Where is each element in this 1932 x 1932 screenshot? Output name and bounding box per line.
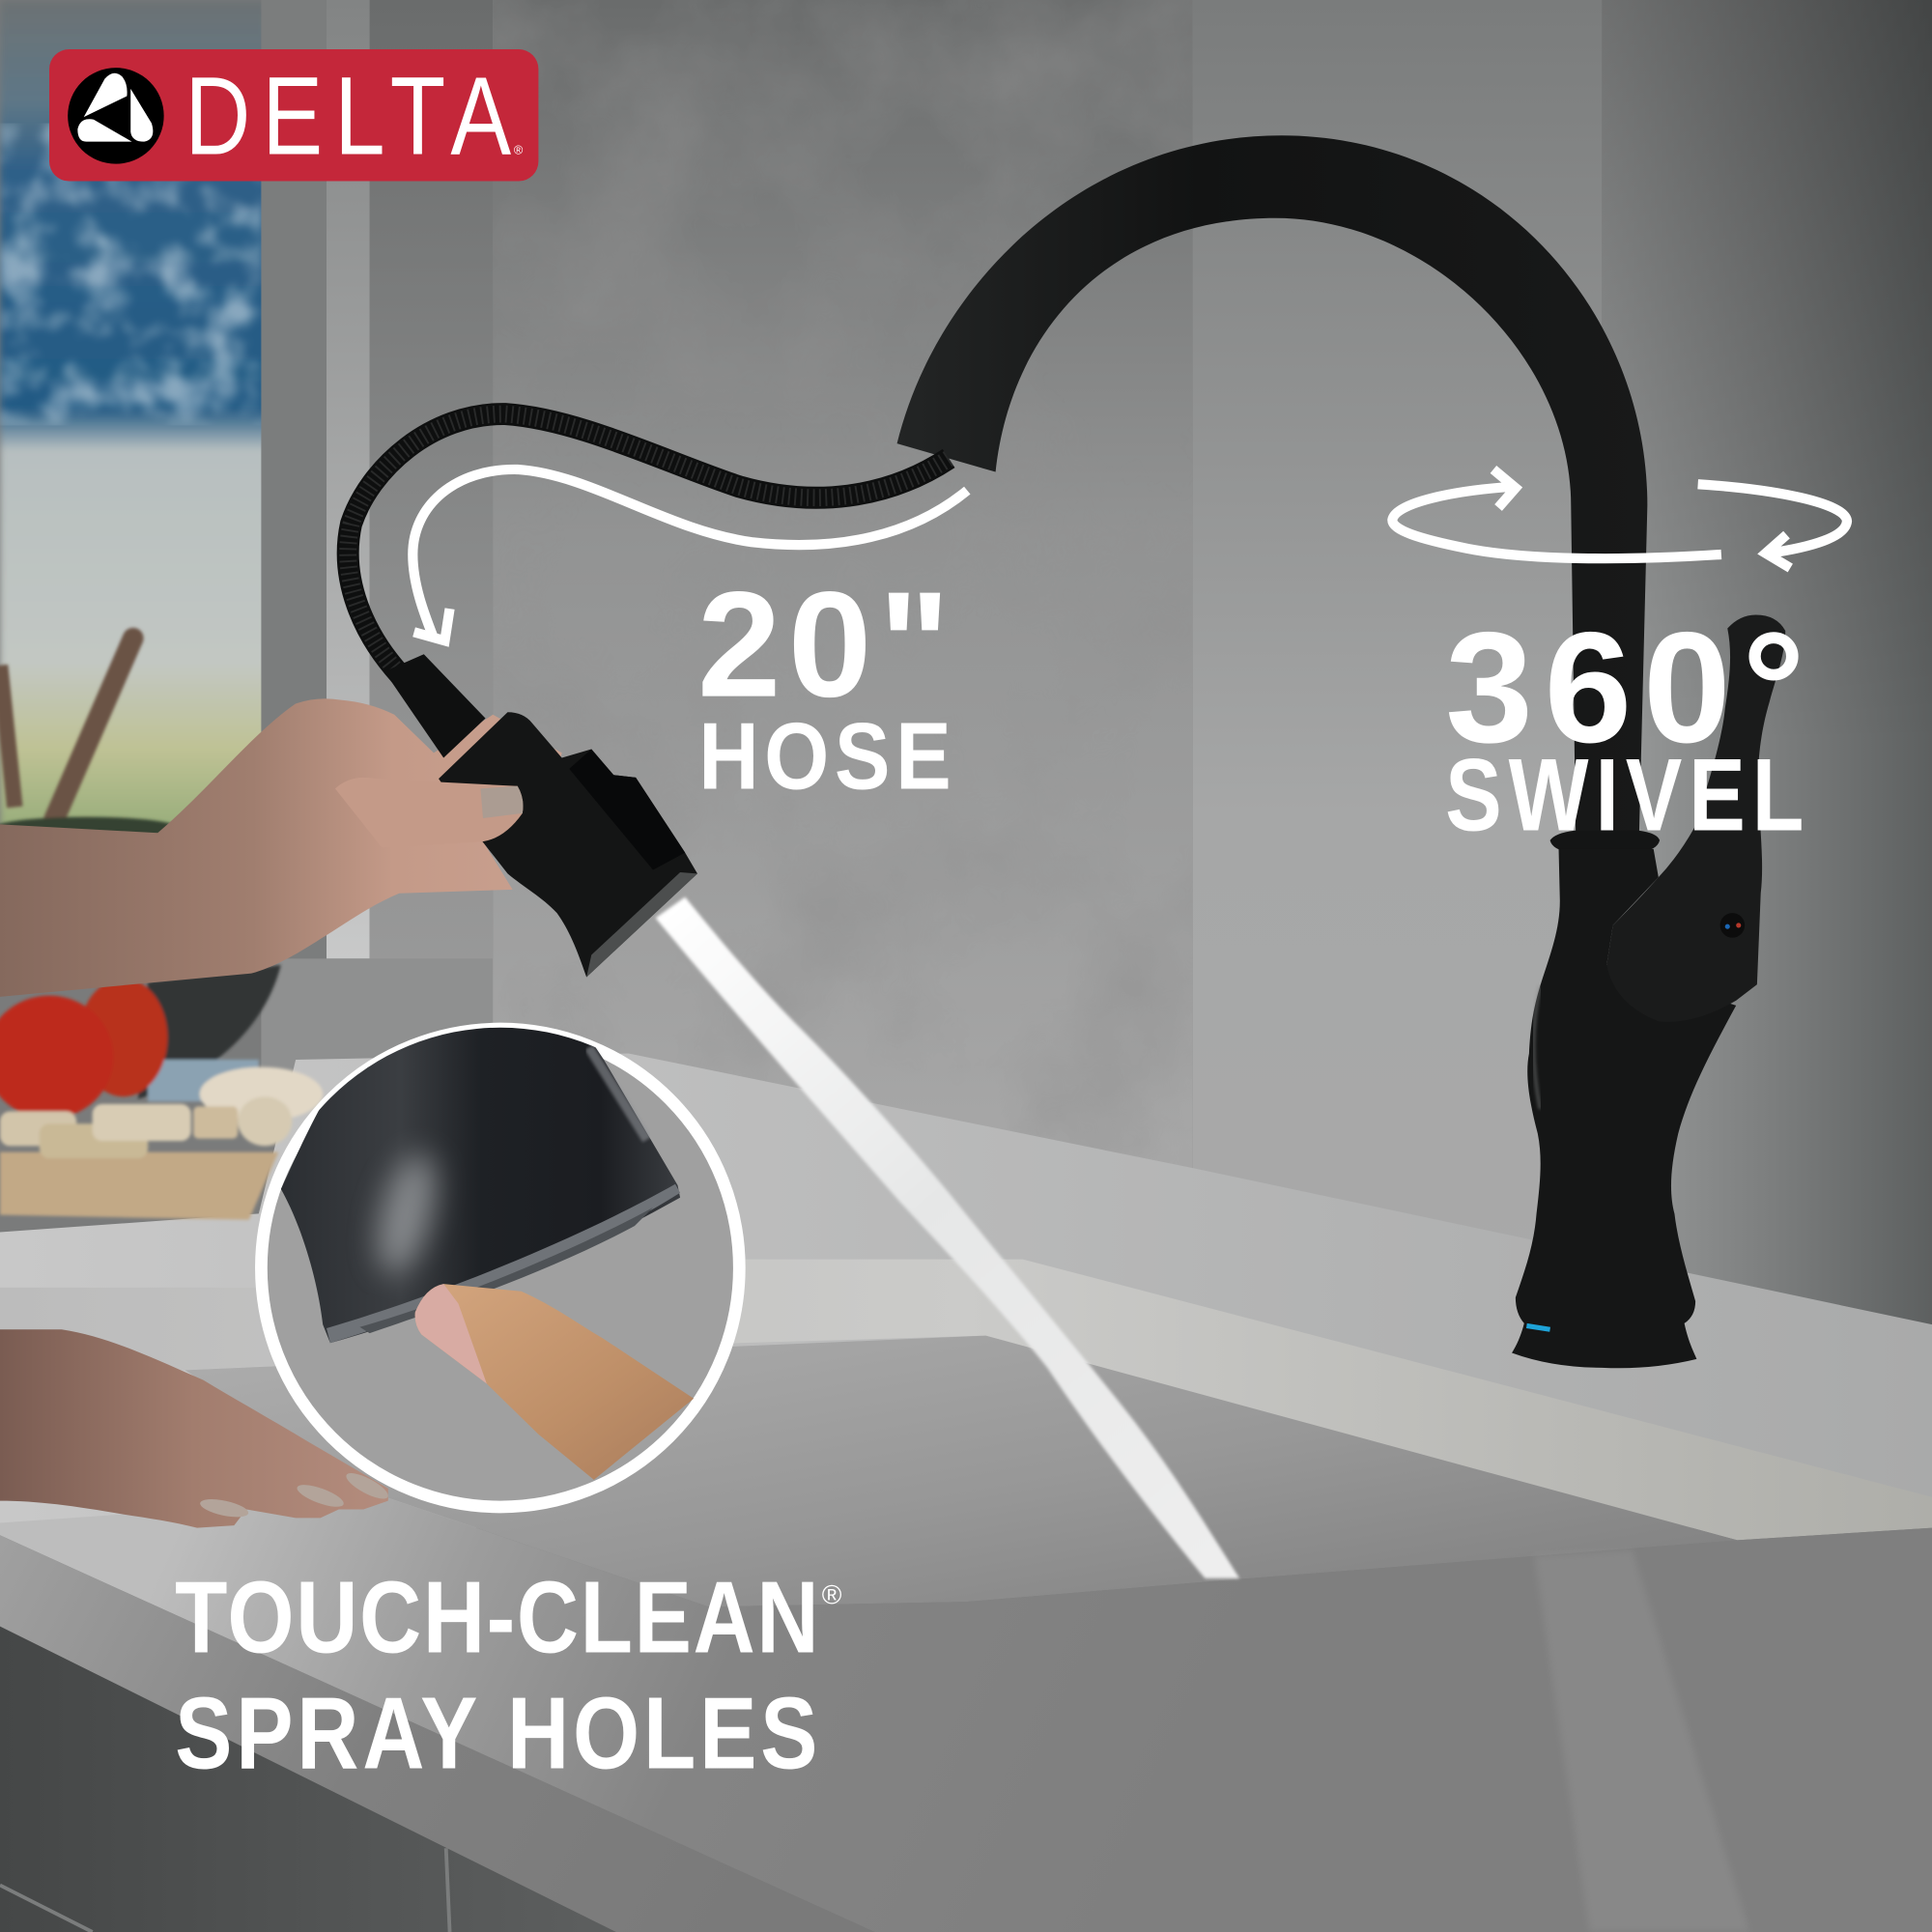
registered mark: ®: [514, 142, 524, 156]
back counter surface: [0, 1054, 1932, 1528]
cabinet: [0, 1627, 616, 1932]
inset circle: touch-clean spray holes: [261, 1023, 739, 1507]
cutting board: [0, 1152, 278, 1220]
utensils: [0, 639, 133, 819]
counter reflection: [1534, 1550, 1749, 1932]
spray head: [439, 712, 697, 977]
upper hand: [0, 698, 562, 997]
window frame: [261, 0, 370, 961]
callout: 20 inch hose: [697, 560, 952, 810]
lower hand: [0, 1329, 391, 1528]
arrowhead: [414, 609, 450, 640]
callout: 360 degree swivel: 360°: [1445, 599, 1805, 776]
fingernails: [199, 1468, 391, 1520]
mushroom slices: [0, 1104, 191, 1158]
callout: touch-clean spray holes: [175, 1560, 842, 1790]
thumb button: [569, 750, 685, 870]
water stream: [656, 897, 1239, 1578]
counter front edge: [0, 1535, 875, 1932]
faucet body: [1512, 849, 1736, 1368]
wordmark: DELTA: [185, 55, 511, 179]
head highlight: [367, 1148, 446, 1280]
bowl: [138, 965, 281, 1099]
cabinet door gap: [0, 1848, 450, 1932]
sink rim: [0, 1260, 1932, 1540]
hose connector: [384, 654, 486, 757]
faucet: [897, 135, 1785, 1368]
thumbnail: [480, 786, 523, 818]
sprayer head close-up: [281, 1023, 680, 1343]
temperature indicator: [1720, 913, 1745, 938]
hose length arrow: [412, 469, 967, 640]
marble panel: [493, 0, 1193, 1182]
swivel arrowhead left: [1493, 469, 1516, 508]
side wall: [370, 0, 493, 1109]
faucet handle: [1606, 614, 1785, 1022]
wall art picture: [0, 0, 268, 850]
callout: touch-clean spray holes: SPRAY HOLES: [175, 1676, 817, 1790]
callout: 20 inch hose: HOSE: [698, 702, 952, 810]
swivel arrowhead right: [1766, 535, 1790, 568]
fingertip and nail: [415, 1284, 487, 1383]
salad: [0, 817, 179, 839]
spray face: [586, 872, 697, 977]
callout: 20 inch hose: 20": [697, 560, 950, 728]
front counter: [0, 1495, 1932, 1932]
faucet collar: [1550, 831, 1660, 853]
finger: [415, 1284, 694, 1480]
countertop and sink: [0, 1054, 1932, 1932]
thumb: [335, 778, 523, 848]
logo emblem: [68, 68, 164, 164]
right wall: [1602, 0, 1932, 1355]
mushrooms: [193, 1067, 323, 1146]
swivel arc right: [1698, 484, 1847, 554]
callout: touch-clean spray holes: ®: [822, 1580, 842, 1610]
blue light: [1526, 1325, 1550, 1329]
picture clouds: [0, 124, 261, 425]
sink basin: [185, 1336, 1737, 1606]
faucet body highlight: [1534, 985, 1540, 1109]
Delta logo: [49, 49, 538, 181]
callout: touch-clean spray holes: TOUCH-CLEAN: [175, 1560, 819, 1674]
centre wall: [1193, 0, 1602, 1355]
callout: 360 degree swivel: SWIVEL: [1445, 736, 1804, 853]
head edge highlight: [589, 1047, 647, 1140]
pull-down hose: [348, 414, 949, 675]
spray holes: [359, 1208, 653, 1333]
pull-down spray wand: [384, 654, 697, 977]
callout: 360 degree swivel: [1445, 599, 1805, 853]
blue dish: [148, 1060, 259, 1101]
tomatoes: [0, 979, 167, 1119]
swivel arrow: [1392, 469, 1847, 568]
faucet spout: [897, 135, 1647, 850]
spray face rim: [327, 1184, 680, 1343]
food and bowl scene: [0, 639, 323, 1220]
